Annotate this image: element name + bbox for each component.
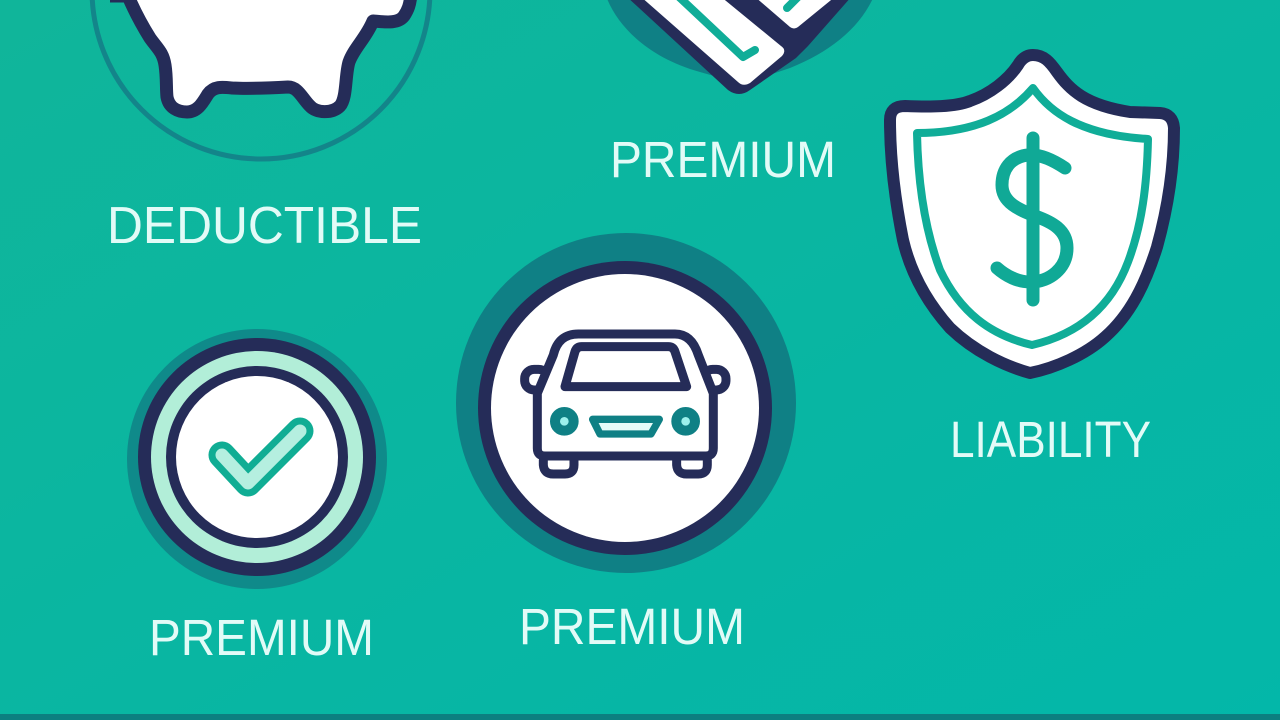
icon: handshake cards <box>606 0 874 94</box>
label: deductible: DEDUCTIBLE <box>107 197 422 255</box>
icon: car in circle <box>456 233 796 573</box>
icon: piggy bank in circle <box>92 0 430 159</box>
icon: shield with dollar sign <box>890 55 1174 373</box>
label: premium top: PREMIUM <box>610 131 836 188</box>
label: premium middle: PREMIUM <box>519 598 745 655</box>
label: liability: LIABILITY <box>950 411 1151 468</box>
label: premium bottom left: PREMIUM <box>149 609 374 666</box>
icon: check mark badge <box>127 329 387 589</box>
